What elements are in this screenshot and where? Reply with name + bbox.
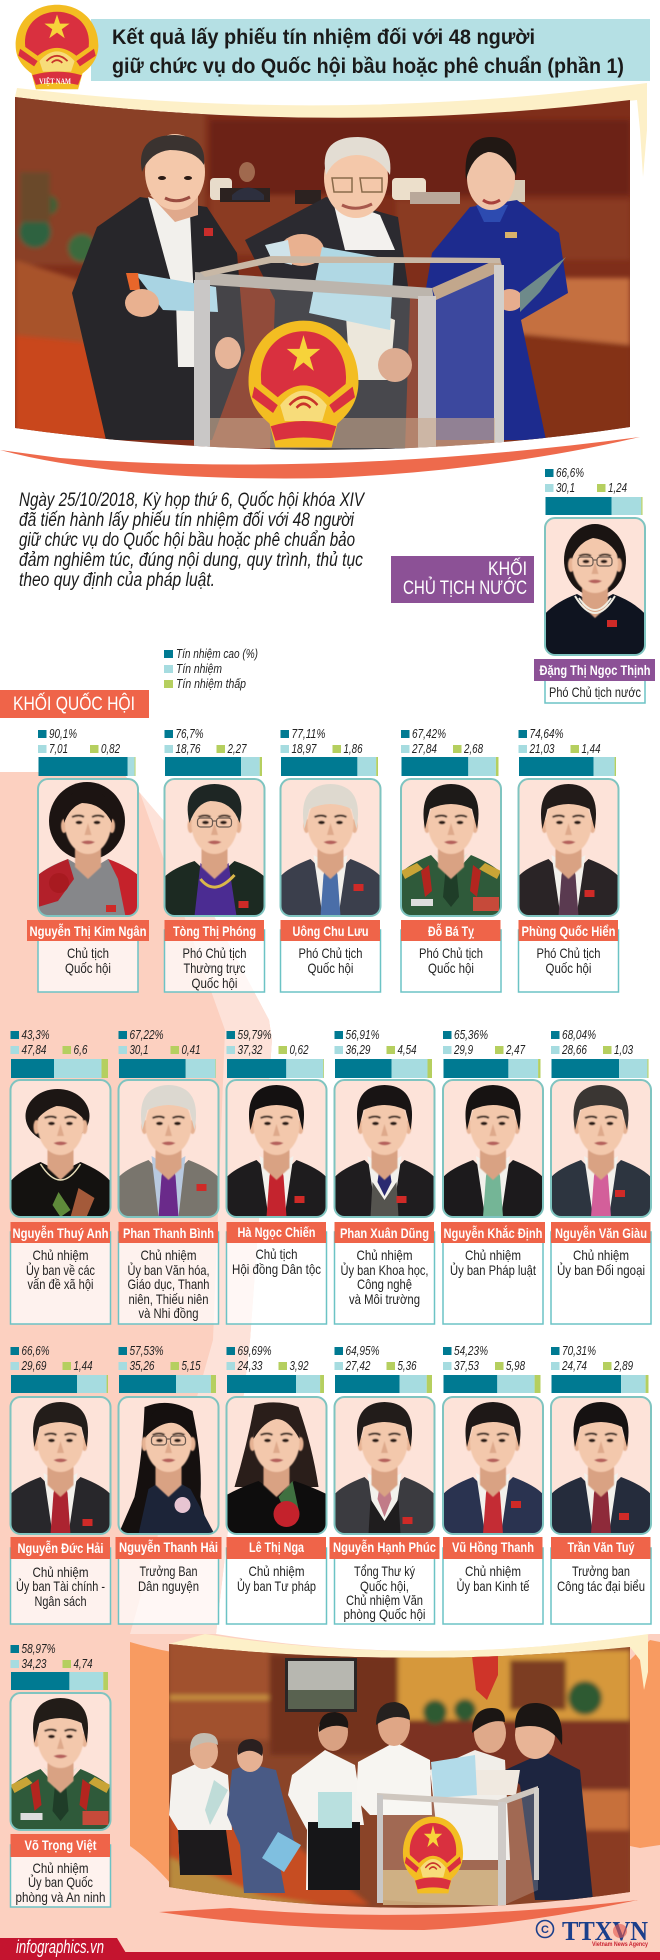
role: Chủ nhiệm [32,1860,88,1876]
legend: Tín nhiệm [176,661,222,676]
card: Vũ Hồng Thanh: 54,23% [454,1343,488,1358]
card: Nguyễn Khắc Định: 29,9 [453,1042,473,1057]
deputies [169,1702,593,1900]
heading: Khối Chủ tịch nước [391,556,534,603]
card: Nguyễn Hạnh Phúc: 5,36 [398,1358,417,1373]
name [226,1537,326,1559]
role: Ủy ban Tài chính - [16,1577,105,1594]
name: Nguyễn Hạnh Phúc [333,1539,436,1555]
card: Lê Thị Nga: 69,69% [238,1343,272,1358]
portrait [516,779,620,919]
card: Uông Chu Lưu: 18,97 [292,741,317,756]
card: Nguyễn Đức Hải: 1,44 [74,1358,92,1373]
role: Ủy ban về các [26,1261,95,1278]
card: Nguyễn Đức Hải [8,1343,112,1624]
role: Quốc hội [65,960,111,976]
role [16,1564,105,1609]
card: Phùng Quốc Hiển: 74,64% [530,726,564,741]
role: Thường trực [184,960,246,976]
card: Hà Ngọc Chiến: 59,79% [238,1027,272,1042]
card: Nguyễn Khắc Định: 2,47 [505,1042,526,1057]
role: Công nghệ [357,1276,412,1292]
role: Quốc hội, [360,1578,409,1594]
legend: Tín nhiệm thấp [176,676,246,691]
role: Quốc hội [308,960,354,976]
intro text: giữ chức vụ do Quốc hội bầu hoặc phê chuẩn bảo [19,530,355,551]
card: Nguyễn Hạnh Phúc: 64,95% [346,1343,380,1358]
card: Phan Xuân Dũng: 4,54 [398,1042,416,1057]
name [334,1222,434,1243]
card: Uông Chu Lưu [278,726,382,992]
name: Nguyễn Thanh Hải [119,1539,218,1555]
flag [472,1656,498,1700]
name: Phan Thanh Bình [123,1225,214,1241]
name [226,1222,326,1243]
card: Nguyễn Đức Hải: 29,69 [21,1358,47,1373]
name [116,1537,222,1559]
card: Trần Văn Tuý: 24,74 [561,1358,587,1373]
card: Đỗ Bá Tỵ [399,726,503,992]
role: phòng Quốc hội [344,1606,426,1622]
role: Ủy ban Tư pháp [237,1577,316,1594]
role [128,1247,210,1321]
name [27,920,149,941]
card: Đặng Thị Ngọc Thịnh: 66,6% [556,465,584,480]
role: Phó Chủ tịch [298,945,362,961]
title line 1: Kết quả lấy phiếu tín nhiệm đối với 48 người [112,26,535,49]
card: Lê Thị Nga [224,1343,328,1624]
card: Vũ Hồng Thanh: 37,53 [454,1358,480,1373]
role: Chủ nhiệm [573,1247,629,1263]
footer [0,1937,660,1960]
card: Nguyễn Thị Kim Ngân: 0,82 [101,741,121,756]
name [164,920,264,941]
card: Nguyễn Đức Hải: 66,6% [22,1343,50,1358]
icon: national emblem [16,5,98,89]
role [26,1247,95,1292]
portrait [162,779,266,919]
role [557,1247,645,1278]
intro text: theo quy định của pháp luật. [19,570,215,591]
card: Nguyễn Thuý Anh: 47,84 [22,1042,46,1057]
legend [164,646,258,691]
icon: emblem on ballot box [249,321,358,447]
card: Trần Văn Tuý: 70,31% [562,1343,596,1358]
name [551,1537,650,1559]
name [280,920,380,941]
card: Uông Chu Lưu: 1,86 [344,741,363,756]
name: Vũ Hồng Thanh [452,1539,534,1555]
portrait [8,1693,112,1833]
name [401,920,500,941]
role: Chủ nhiệm [356,1247,412,1263]
name [10,1834,110,1857]
name [330,1537,440,1559]
logo: TTXVN: TTXVN [562,1916,648,1946]
role: Chủ nhiệm [465,1563,521,1579]
icon: emblem on second box [403,1817,463,1893]
name: Hà Ngọc Chiến [238,1224,316,1240]
role: Ủy ban Khoa học, [340,1261,428,1278]
person: woman in blue [424,137,568,440]
card: Lê Thị Nga: 24,33 [237,1358,263,1373]
name: Tòng Thị Phóng [173,923,256,939]
card: Phan Thanh Bình: 67,22% [130,1027,164,1042]
name: Uông Chu Lưu [292,923,368,939]
role: Quốc hội [546,960,592,976]
card: Nguyễn Văn Giàu: 1,03 [614,1042,634,1057]
portrait [543,518,647,658]
portrait [8,1080,112,1220]
portrait [116,1080,220,1220]
role [237,1563,316,1594]
intro text: Ngày 25/10/2018, Kỳ họp thứ 6, Quốc hội khóa XIV [19,490,366,511]
card: Nguyễn Thanh Hải: 57,53% [130,1343,164,1358]
person: centre man [245,137,412,450]
role: Ủy ban Quốc [28,1873,93,1890]
name: Lê Thị Nga [249,1539,304,1555]
card: Nguyễn Thuý Anh: 6,6 [74,1042,88,1057]
card: Hà Ngọc Chiến: 0,62 [290,1042,309,1057]
role [450,1247,536,1278]
role: Chủ nhiệm [248,1563,304,1579]
role [456,1563,530,1594]
role: và Môi trường [349,1291,420,1307]
role: Trưởng ban [572,1563,630,1579]
card: Trần Văn Tuý [549,1343,653,1624]
role: Trưởng Ban [140,1563,198,1579]
name: Nguyễn Đức Hải [18,1540,104,1556]
card: Hà Ngọc Chiến: 37,32 [238,1042,263,1057]
role [536,945,600,976]
role: Phó Chủ tịch [536,945,600,961]
name [10,1537,110,1559]
portrait [224,1397,328,1537]
role: Quốc hội [428,960,474,976]
role [340,1247,428,1307]
role [344,1563,426,1622]
cream arc above top photo [15,83,647,177]
role [65,945,111,976]
role: Chủ nhiệm [32,1247,88,1263]
name [443,1537,542,1559]
red swoosh under bottom photo [159,1900,638,1930]
card: Đặng Thị Ngọc Thịnh [534,465,655,703]
card: Nguyễn Thị Kim Ngân: 90,1% [49,726,77,741]
card: Võ Trọng Việt: 34,23 [22,1656,47,1671]
card: Nguyễn Thanh Hải [116,1343,222,1624]
card: Đỗ Bá Tỵ: 27,84 [411,741,437,756]
card: Nguyễn Thuý Anh: 43,3% [22,1027,50,1042]
name [518,920,618,941]
role: Chủ nhiệm Văn [346,1592,423,1608]
role: Chủ nhiệm [140,1247,196,1263]
card: Phan Xuân Dũng: 56,91% [346,1027,380,1042]
logo: TTXVN: Vietnam News Agency [592,1942,649,1948]
role: Dân nguyện [138,1578,199,1594]
card: Tòng Thị Phóng [162,726,266,992]
role: Ủy ban Pháp luật [450,1261,536,1278]
card: Võ Trọng Việt: 4,74 [74,1656,92,1671]
role: Chủ nhiệm [32,1564,88,1580]
orange panel behind bottom photo [130,1640,660,1885]
card: Vũ Hồng Thanh: 5,98 [506,1358,526,1373]
portrait [224,1080,328,1220]
role: Ủy ban Văn hóa, [128,1261,210,1278]
name: Trần Văn Tuý [568,1539,635,1555]
name: Võ Trọng Việt [24,1837,97,1853]
card: Phan Thanh Bình [116,1027,220,1324]
card: Phùng Quốc Hiển: 1,44 [582,741,600,756]
role [138,1563,199,1594]
card: Nguyễn Khắc Định: 65,36% [454,1027,488,1042]
heading: Khối Quốc hội: KHỐI QUỐC HỘI [13,693,135,715]
main photo: leaders voting [15,90,630,475]
card: Đỗ Bá Tỵ: 2,68 [463,741,484,756]
name [441,1222,545,1243]
portrait [36,779,140,919]
role: niên, Thiếu niên [128,1291,208,1307]
card: Nguyễn Hạnh Phúc: 27,42 [345,1358,371,1373]
ballot box [194,256,504,456]
red swoosh under top photo [0,437,640,478]
card: Tòng Thị Phóng: 76,7% [176,726,204,741]
card: Nguyễn Thị Kim Ngân [27,726,149,992]
role: Phó Chủ tịch [182,945,246,961]
card: Đặng Thị Ngọc Thịnh: 1,24 [608,480,627,495]
card: Phan Xuân Dũng [332,1027,436,1324]
ballot papers [309,247,394,330]
card: Hà Ngọc Chiến [224,1027,328,1324]
card: Tòng Thị Phóng: 18,76 [176,741,201,756]
legend: Tín nhiệm cao (%) [176,646,258,661]
card: Phùng Quốc Hiển: 21,03 [529,741,555,756]
card: Nguyễn Thanh Hải: 5,15 [182,1358,201,1373]
role: Ủy ban Kinh tế [456,1577,530,1594]
portrait [332,1080,436,1220]
portrait [399,779,503,919]
card: Nguyễn Hạnh Phúc [330,1343,440,1624]
role: Giáo dục, Thanh [128,1276,210,1292]
card: Uông Chu Lưu: 77,11% [292,726,326,741]
card: Tòng Thị Phóng: 2,27 [227,741,247,756]
background shapes [0,772,660,1960]
role: và Nhi đồng [138,1305,198,1321]
person: left man [72,134,245,440]
name [551,1222,650,1243]
name [118,1222,218,1243]
cream arc above bottom photo [169,1634,648,1690]
card: Phan Thanh Bình: 30,1 [130,1042,148,1057]
role: Tổng Thư ký [354,1563,415,1579]
card: Nguyễn Thị Kim Ngân: 7,01 [49,741,68,756]
intro text [19,490,366,591]
card: Nguyễn Văn Giàu: 68,04% [562,1027,596,1042]
intro text: đảm nghiêm túc, đúng nội dung, quy trình, thủ tục [19,550,363,571]
heading: Khối Chủ tịch nước: CHỦ TỊCH NƯỚC [403,577,527,599]
role: Chủ tịch [67,945,109,961]
name: Nguyễn Khắc Định [444,1224,542,1241]
portrait [278,779,382,919]
role: Chủ nhiệm [465,1247,521,1263]
card: Phan Xuân Dũng: 36,29 [346,1042,370,1057]
title band [91,19,650,81]
role [232,1246,321,1277]
role: Ngân sách [34,1593,86,1609]
heading: Khối Chủ tịch nước: KHỐI [488,558,527,580]
role: Quốc hội [192,975,238,991]
card: Phùng Quốc Hiển [516,726,620,992]
portrait [549,1397,653,1537]
card: Nguyễn Khắc Định [441,1027,545,1324]
card: Phan Thanh Bình: 0,41 [182,1042,200,1057]
name [534,659,655,681]
name: Nguyễn Thị Kim Ngân [30,923,146,939]
card: Lê Thị Nga: 3,92 [290,1358,309,1373]
name: Nguyễn Thuý Anh [12,1225,108,1241]
role [557,1563,645,1594]
card: Nguyễn Thanh Hải: 35,26 [130,1358,155,1373]
role [182,945,246,991]
card: Võ Trọng Việt: 58,97% [22,1641,56,1656]
portrait [549,1080,653,1220]
logo: TTXVN [536,1916,649,1948]
logo: TTXVN: C [541,1924,549,1936]
name: Phùng Quốc Hiển [522,923,616,939]
name: Phan Xuân Dũng [340,1225,429,1241]
big screen [285,1658,357,1712]
ballot box 2 [377,1786,539,1907]
role: Phó Chủ tịch [419,945,483,961]
card: Nguyễn Văn Giàu [549,1027,653,1324]
card: Nguyễn Thuý Anh [8,1027,112,1324]
icon: national emblem: VIỆT NAM [39,77,71,86]
card: Vũ Hồng Thanh [441,1343,545,1624]
portrait [441,1397,545,1537]
card: Nguyễn Văn Giàu: 28,66 [561,1042,588,1057]
role [419,945,483,976]
card: Đặng Thị Ngọc Thịnh: 30,1 [556,480,575,495]
name [10,1222,110,1243]
title line 2: giữ chức vụ do Quốc hội bầu hoặc phê chuẩn (phần 1) [112,55,624,78]
card: Trần Văn Tuý: 2,89 [613,1358,633,1373]
portrait [332,1397,436,1537]
bottom photo: deputies voting [165,1640,635,1930]
role [298,945,362,976]
role [16,1860,106,1905]
role: vấn đề xã hội [28,1276,94,1292]
role: Hội đồng Dân tộc [232,1261,321,1277]
footer: infographics.vn [16,1937,104,1957]
role: phòng và An ninh [16,1889,106,1905]
card: Đỗ Bá Tỵ: 67,42% [412,726,446,741]
portrait [8,1397,112,1537]
card: Võ Trọng Việt [8,1641,112,1907]
intro text: đã tiến hành lấy phiếu tín nhiệm đối với 48 người [19,510,355,531]
name: Đỗ Bá Tỵ [428,923,474,939]
portrait [118,1397,218,1534]
role: Chủ tịch [256,1246,298,1262]
heading: Khối Quốc hội [0,690,149,718]
portrait [441,1080,545,1220]
